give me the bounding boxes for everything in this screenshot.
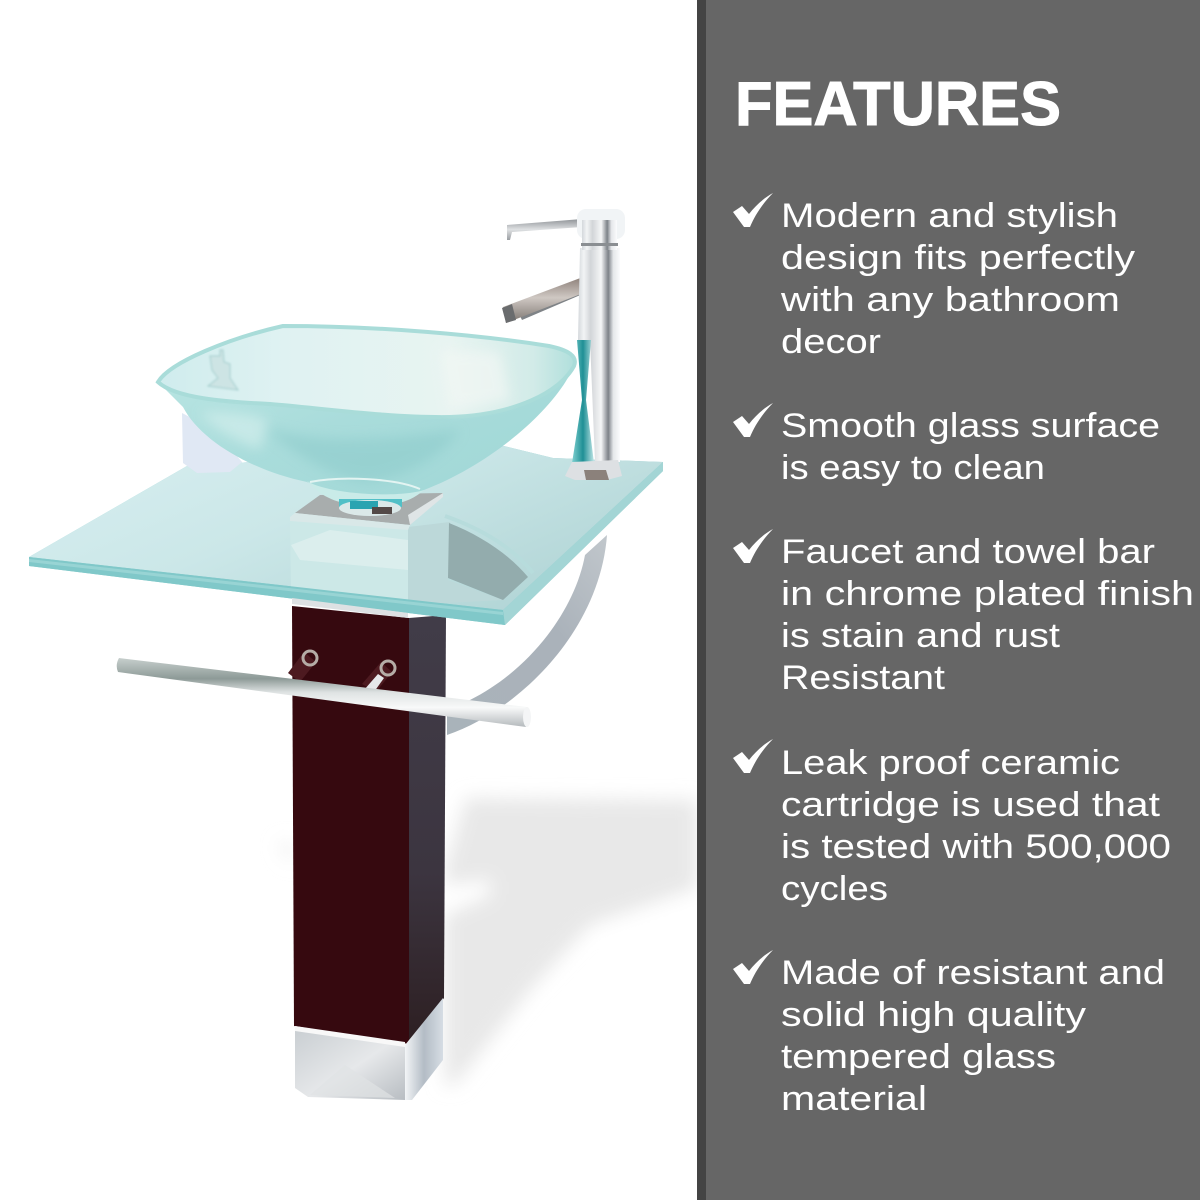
- feature 5: tempered glass: [781, 1038, 1056, 1076]
- glass vessel bowl: [158, 326, 575, 503]
- handle lever: [507, 219, 582, 240]
- feature 3: Resistant: [781, 659, 946, 697]
- feature 2: Smooth glass surface: [781, 407, 1160, 445]
- soap dispenser: [182, 413, 242, 473]
- feature 4: Leak proof ceramic: [781, 744, 1120, 782]
- icon: check mark: [733, 950, 773, 984]
- spout: [520, 288, 585, 320]
- feature 1: decor: [781, 323, 881, 361]
- pedestal: [292, 606, 446, 1044]
- teal reflection: [572, 340, 594, 463]
- feature 3: Faucet and towel bar: [781, 533, 1155, 571]
- icon: check mark: [733, 529, 773, 563]
- base: [565, 460, 622, 480]
- icon: check mark: [733, 193, 773, 227]
- heading: features: FEATURES: [735, 70, 1061, 139]
- feature 1: with any bathroom: [780, 281, 1120, 319]
- bracket reflection in glass: [290, 517, 408, 613]
- chrome foot: [295, 998, 443, 1100]
- feature 3: is stain and rust: [781, 617, 1061, 655]
- feature 4: cycles: [781, 870, 888, 908]
- feature 4: cartridge is used that: [781, 786, 1161, 824]
- glass countertop: [29, 446, 663, 625]
- chrome faucet: [502, 209, 625, 480]
- icon: check mark: [733, 403, 773, 437]
- feature 1: Modern and stylish: [781, 197, 1118, 235]
- bowl interior: [158, 326, 575, 417]
- feature 4: [733, 739, 1171, 908]
- towel bar pegs: [288, 651, 395, 692]
- feature 1: [733, 193, 1135, 361]
- feature 5: material: [781, 1080, 927, 1118]
- feature 2: is easy to clean: [781, 449, 1045, 487]
- bracket under bowl: [290, 493, 443, 530]
- icon: check mark: [733, 739, 773, 773]
- feature 4: is tested with 500,000: [781, 828, 1171, 866]
- feature 5: solid high quality: [781, 996, 1086, 1034]
- floor shadow: [278, 798, 697, 1085]
- reflection: curved arm: [448, 523, 528, 600]
- feature 2: [733, 403, 1160, 487]
- feature 3: in chrome plated finish: [781, 575, 1194, 613]
- support arm: [447, 535, 607, 735]
- panel: features background: [697, 0, 1200, 1200]
- feature 5: [733, 950, 1165, 1118]
- feature 1: design fits perfectly: [781, 239, 1135, 277]
- feature 3: [733, 529, 1194, 697]
- product photo: glass pedestal sink: [29, 209, 697, 1100]
- drain: [339, 499, 402, 516]
- faucet column: [578, 248, 620, 462]
- towel bar: [117, 658, 531, 727]
- feature 5: Made of resistant and: [781, 954, 1165, 992]
- cap: [577, 209, 625, 239]
